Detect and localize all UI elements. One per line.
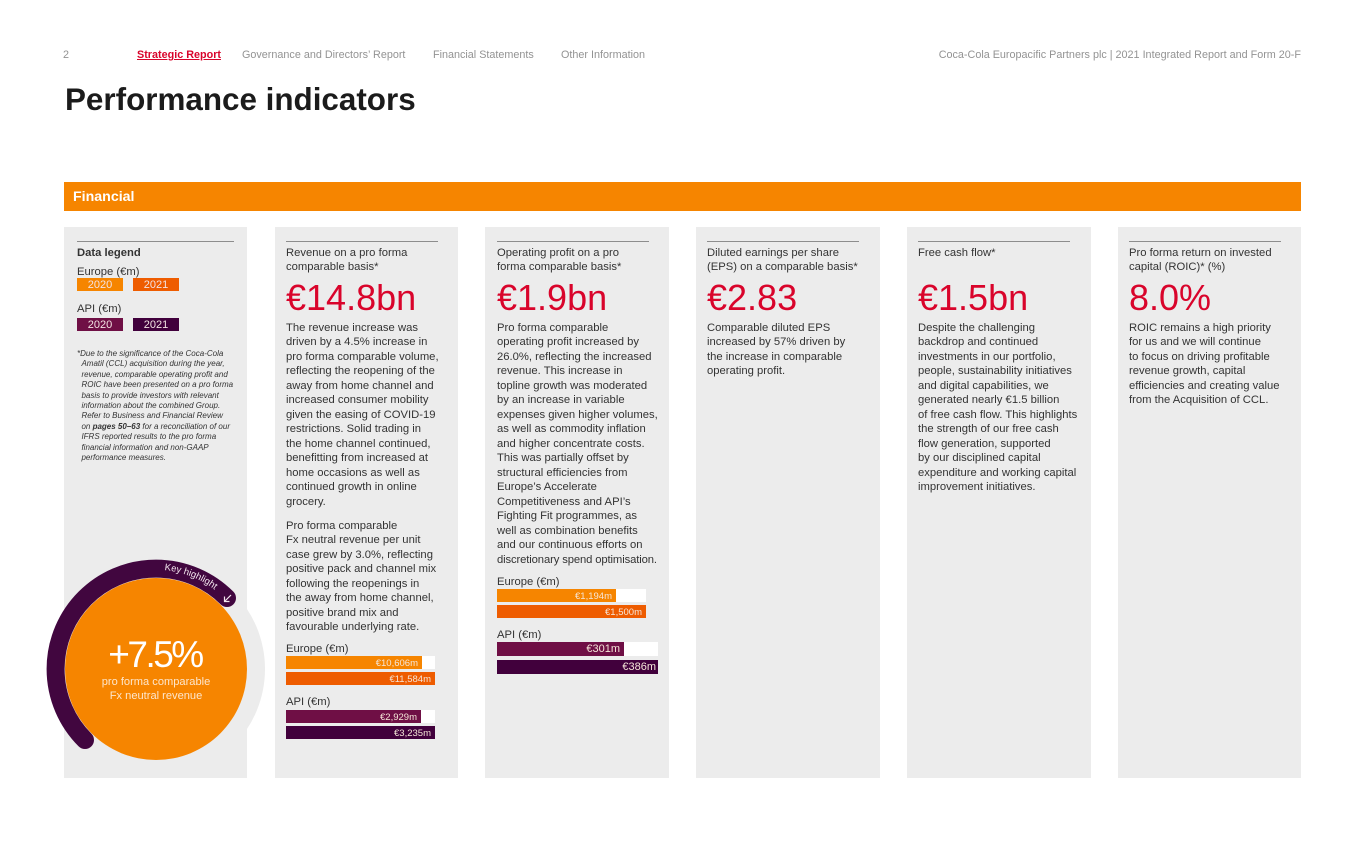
ROIC heading: capital (ROIC)* (%) bbox=[1129, 261, 1225, 273]
revenue text second paragraph: Pro forma comparable bbox=[286, 520, 397, 532]
operating profit text: Europe’s Accelerate bbox=[497, 481, 597, 493]
revenue text: away from home channel and bbox=[286, 380, 434, 392]
legend heading: Data legend bbox=[77, 246, 141, 258]
section banner: financial: Financial bbox=[73, 189, 134, 205]
navigation: governance: Governance and Directors’ Report bbox=[242, 49, 405, 61]
bar: operating profit Europe 2020 bbox=[497, 589, 646, 602]
navigation: financial statements: Financial Statements bbox=[433, 49, 534, 61]
legend swatch: Europe 2021: 2021 bbox=[144, 279, 168, 291]
operating profit chart label: Europe: Europe (€m) bbox=[497, 576, 560, 588]
grey backing circle bbox=[47, 560, 265, 778]
orange circle bbox=[65, 578, 247, 760]
footnote: on pages 50–63 for a reconciliation of our bbox=[81, 422, 230, 431]
free cash flow text: backdrop and continued bbox=[918, 336, 1038, 348]
footnote: information about the combined Group. bbox=[81, 401, 220, 410]
free cash flow text: and digital capabilities, we bbox=[918, 380, 1049, 392]
revenue text: driven by a 4.5% increase in bbox=[286, 336, 427, 348]
free cash flow text: Despite the challenging bbox=[918, 322, 1035, 334]
free cash flow text: by our disciplined capital bbox=[918, 452, 1041, 464]
EPS text bbox=[707, 322, 846, 377]
revenue text second paragraph: favourable underlying rate. bbox=[286, 621, 419, 633]
bar: revenue API 2020: €2,929m bbox=[380, 712, 417, 723]
footnote: financial information and non-GAAP bbox=[81, 443, 209, 452]
EPS heading bbox=[707, 246, 858, 273]
operating profit text: and our continuous efforts on bbox=[497, 539, 643, 551]
operating profit text bbox=[497, 322, 658, 566]
legend label: Europe: Europe (€m) bbox=[77, 266, 140, 278]
revenue text second paragraph: case grew by 3.0%, reflecting bbox=[286, 548, 433, 560]
ROIC text: revenue growth, capital bbox=[1129, 365, 1245, 377]
report name: Coca-Cola Europacific Partners plc | 2021 Integrated Report and Form 20-F bbox=[939, 49, 1301, 61]
operating profit text: topline growth was moderated bbox=[497, 380, 647, 392]
revenue text: continued growth in online bbox=[286, 481, 417, 493]
navigation: other information: Other Information bbox=[561, 49, 645, 61]
revenue text second paragraph bbox=[286, 520, 436, 633]
operating profit text: well as combination benefits bbox=[497, 524, 638, 536]
bar: operating profit API 2021 bbox=[497, 660, 658, 674]
ROIC text: efficiencies and creating value bbox=[1129, 380, 1280, 392]
icon: arrow bbox=[224, 595, 231, 602]
operating profit text: revenue. This increase in bbox=[497, 365, 622, 377]
panel: data legend bbox=[64, 227, 247, 778]
bar: revenue Europe 2021 bbox=[286, 672, 435, 685]
bar: operating profit API 2021: €386m bbox=[622, 661, 656, 673]
revenue heading bbox=[286, 246, 408, 273]
purple arc bbox=[56, 569, 227, 740]
footnote: *Due to the significance of the Coca-Cola bbox=[77, 349, 223, 358]
ROIC heading: Pro forma return on invested bbox=[1129, 246, 1272, 258]
operating profit text: Pro forma comparable bbox=[497, 322, 608, 334]
operating profit text: and higher concentrate costs. bbox=[497, 438, 645, 450]
panel: diluted EPS bbox=[696, 227, 880, 778]
free cash flow text: generated nearly €1.5 billion bbox=[918, 394, 1059, 406]
ROIC value: 8.0% bbox=[1129, 277, 1211, 318]
operating profit text: discretionary spend optimisation. bbox=[497, 554, 657, 566]
footnote: Amatil (CCL) acquisition during the year, bbox=[81, 359, 225, 368]
ROIC text: for us and we will continue bbox=[1129, 336, 1261, 348]
free cash flow text: flow generation, supported bbox=[918, 438, 1051, 450]
legend swatch: API 2021 bbox=[133, 318, 179, 331]
revenue text second paragraph: following the reopenings in bbox=[286, 578, 419, 590]
revenue text second paragraph: Fx neutral revenue per unit bbox=[286, 534, 420, 546]
revenue text bbox=[286, 322, 439, 508]
footnote: performance measures. bbox=[81, 453, 166, 462]
legend label: API: API (€m) bbox=[77, 303, 121, 315]
panel: ROIC bbox=[1118, 227, 1301, 778]
operating profit text: expenses given higher volumes, bbox=[497, 408, 658, 420]
revenue text second paragraph: positive pack and channel mix bbox=[286, 563, 436, 575]
highlight value: +7.5% bbox=[108, 634, 203, 675]
legend swatch: Europe 2021 bbox=[133, 278, 179, 291]
EPS heading: Diluted earnings per share bbox=[707, 246, 839, 258]
operating profit text: operating profit increased by bbox=[497, 336, 639, 348]
revenue text: home occasions as well as bbox=[286, 466, 420, 478]
page number: 2 bbox=[63, 49, 69, 61]
revenue text: increased consumer mobility bbox=[286, 394, 429, 406]
bar: operating profit Europe 2021 bbox=[497, 605, 646, 618]
highlight caption: pro forma comparable bbox=[102, 676, 210, 688]
section banner: financial bbox=[64, 182, 1301, 211]
bar: operating profit API 2020: €301m bbox=[586, 643, 620, 655]
EPS text: operating profit. bbox=[707, 365, 785, 377]
revenue text second paragraph: the away from home channel, bbox=[286, 592, 434, 604]
ROIC heading bbox=[1129, 246, 1272, 273]
operating profit text: as well as commodity inflation bbox=[497, 423, 646, 435]
free cash flow heading: Free cash flow* bbox=[918, 246, 996, 258]
revenue text: the home channel continued, bbox=[286, 438, 430, 450]
legend swatch: Europe 2020 bbox=[77, 278, 123, 291]
free cash flow value: €1.5bn bbox=[918, 277, 1028, 318]
free cash flow text bbox=[918, 322, 1077, 493]
bar: revenue API 2020 bbox=[286, 710, 435, 723]
revenue text: grocery. bbox=[286, 496, 326, 508]
operating profit text: by an increase in variable bbox=[497, 394, 625, 406]
bar: revenue API 2021: €3,235m bbox=[394, 728, 431, 739]
bar: revenue Europe 2021: €11,584m bbox=[389, 674, 431, 685]
revenue text: The revenue increase was bbox=[286, 322, 418, 334]
legend swatch: API 2020 bbox=[77, 318, 123, 331]
ROIC text: from the Acquisition of CCL. bbox=[1129, 394, 1268, 406]
revenue text: given the easing of COVID-19 bbox=[286, 408, 435, 420]
free cash flow text: the strength of our free cash bbox=[918, 423, 1059, 435]
footnote: ROIC have been presented on a pro forma bbox=[81, 380, 233, 389]
title: Performance indicators bbox=[65, 82, 416, 116]
revenue text: pro forma comparable volume, bbox=[286, 350, 439, 362]
bar: operating profit Europe 2021: €1,500m bbox=[605, 607, 642, 618]
key highlight label: Key highlight bbox=[165, 564, 218, 590]
EPS text: increased by 57% driven by bbox=[707, 336, 845, 348]
footnote: IFRS reported results to the pro forma bbox=[81, 432, 216, 441]
bar: operating profit Europe 2020: €1,194m bbox=[575, 591, 612, 602]
bar: revenue API 2021 bbox=[286, 726, 435, 739]
free cash flow text: expenditure and working capital bbox=[918, 466, 1076, 478]
legend swatch: Europe 2020: 2020 bbox=[88, 279, 112, 291]
operating profit heading: Operating profit on a pro bbox=[497, 246, 619, 258]
footnote: revenue, comparable operating profit and bbox=[81, 370, 228, 379]
bar: revenue Europe 2020: €10,606m bbox=[376, 658, 418, 669]
ROIC text: ROIC remains a high priority bbox=[1129, 322, 1271, 334]
operating profit value: €1.9bn bbox=[497, 277, 607, 318]
panel: operating profit bbox=[485, 227, 669, 778]
panel: revenue bbox=[275, 227, 458, 778]
revenue chart label: API: API (€m) bbox=[286, 696, 330, 708]
revenue text second paragraph: positive brand mix and bbox=[286, 606, 399, 618]
free cash flow text: people, sustainability initiatives bbox=[918, 365, 1072, 377]
panel: free cash flow bbox=[907, 227, 1091, 778]
operating profit text: Competitiveness and API’s bbox=[497, 496, 631, 508]
EPS value: €2.83 bbox=[707, 277, 797, 318]
ROIC text bbox=[1129, 322, 1280, 406]
revenue value: €14.8bn bbox=[286, 277, 416, 318]
bar: revenue Europe 2020 bbox=[286, 656, 435, 669]
revenue text: benefitting from increased at bbox=[286, 452, 428, 464]
revenue heading: comparable basis* bbox=[286, 261, 379, 273]
legend swatch: API 2020: 2020 bbox=[88, 319, 112, 331]
revenue heading: Revenue on a pro forma bbox=[286, 246, 407, 258]
operating profit text: Fighting Fit programmes, as bbox=[497, 510, 637, 522]
EPS heading: (EPS) on a comparable basis* bbox=[707, 261, 858, 273]
revenue chart label: Europe: Europe (€m) bbox=[286, 642, 349, 654]
operating profit heading: forma comparable basis* bbox=[497, 261, 621, 273]
ROIC text: to focus on driving profitable bbox=[1129, 350, 1270, 362]
footnote: Refer to Business and Financial Review bbox=[81, 411, 223, 420]
bar: operating profit API 2020 bbox=[497, 642, 658, 656]
EPS text: Comparable diluted EPS bbox=[707, 322, 830, 334]
highlight caption: Fx neutral revenue bbox=[110, 690, 202, 702]
legend swatch: API 2021: 2021 bbox=[144, 319, 168, 331]
free cash flow text: improvement initiatives. bbox=[918, 481, 1036, 493]
revenue text: reflecting the reopening of the bbox=[286, 365, 435, 377]
operating profit text: 26.0%, reflecting the increased bbox=[497, 350, 651, 362]
operating profit heading bbox=[497, 246, 622, 273]
revenue text: restrictions. Solid trading in bbox=[286, 423, 421, 435]
footnote bbox=[77, 349, 233, 462]
free cash flow text: investments in our portfolio, bbox=[918, 350, 1056, 362]
EPS text: the increase in comparable bbox=[707, 350, 842, 362]
callout: key highlight bbox=[46, 560, 265, 760]
navigation: strategic report: Strategic Report bbox=[137, 49, 221, 61]
operating profit chart label: API: API (€m) bbox=[497, 628, 541, 640]
operating profit text: structural efficiencies from bbox=[497, 466, 627, 478]
free cash flow text: of free cash flow. This highlights bbox=[918, 408, 1077, 420]
operating profit text: This was partially offset by bbox=[497, 452, 629, 464]
footnote: basis to provide investors with relevant bbox=[81, 391, 219, 400]
